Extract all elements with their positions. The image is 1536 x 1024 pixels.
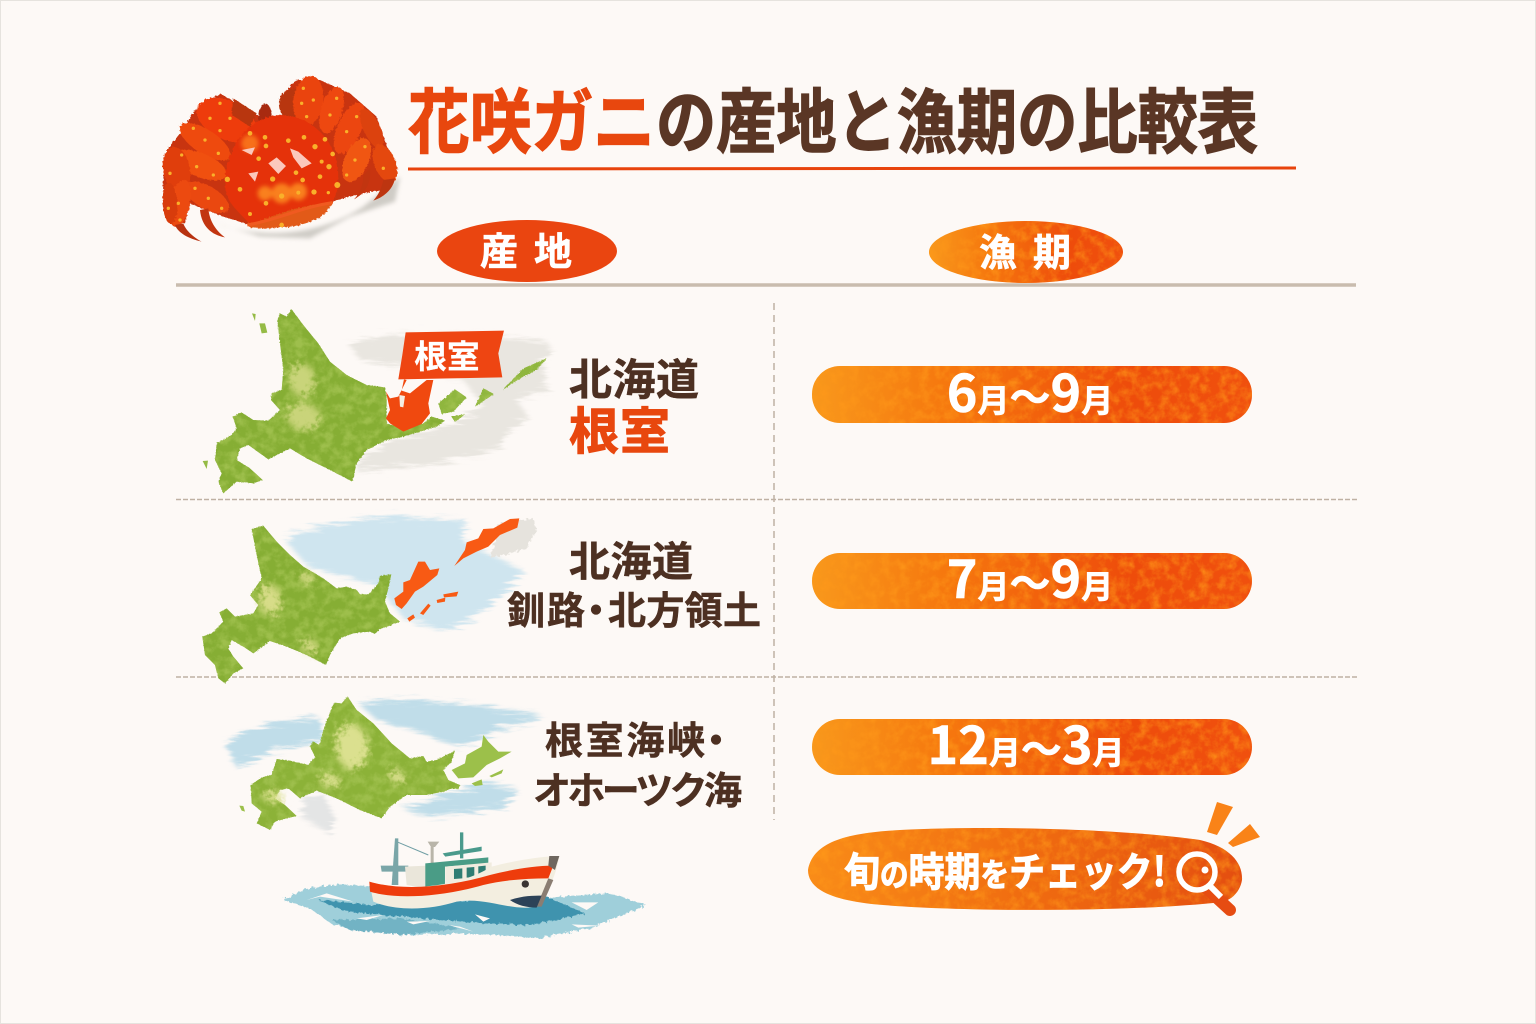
- label: Nemuro Strait and Okhotsk Sea: [533, 710, 742, 815]
- label: Hokkaido Kushiro and Northern Territories: 北海道: [569, 528, 693, 588]
- label: Hokkaido Kushiro and Northern Territories: 北方領土: [608, 580, 761, 635]
- label: Nemuro Strait and Okhotsk Sea: ・: [697, 710, 735, 765]
- text: callout label: 旬の時期をチェック!: [844, 840, 1166, 898]
- label: Hokkaido Nemuro: 北海道: [569, 346, 699, 408]
- callout: check the season: [808, 802, 1260, 910]
- column heading: season: [929, 221, 1123, 283]
- label: Hokkaido Nemuro: [569, 346, 699, 464]
- icon: fishing boat on waves: [283, 832, 647, 938]
- icon: emphasis rays: [1207, 802, 1260, 847]
- title: 花咲ガニ: [408, 67, 655, 168]
- label: Hokkaido Kushiro and Northern Territories: [507, 528, 761, 635]
- title: [408, 67, 1258, 168]
- label: Hokkaido Kushiro and Northern Territories: ・: [577, 580, 615, 635]
- season bar: June to September: 6月〜9月: [947, 352, 1113, 427]
- icon: hanasaki crab: [159, 74, 402, 242]
- title underline: [408, 168, 1296, 169]
- map: Hokkaido with Nemuro Strait and Okhotsk Sea: [225, 697, 543, 833]
- label: Nemuro Strait and Okhotsk Sea: オホーツク海: [533, 760, 742, 815]
- season bar: December to March: [812, 704, 1252, 779]
- season bar: July to September: [812, 538, 1252, 613]
- season bar: June to September: [812, 352, 1252, 427]
- column heading: origin: 産地: [480, 221, 572, 276]
- flag: Nemuro label: 根室: [414, 331, 480, 378]
- icon: magnifying glass: [1179, 854, 1230, 910]
- column heading: origin: [437, 220, 617, 282]
- label: Nemuro Strait and Okhotsk Sea: 根室海峡: [545, 710, 705, 765]
- column heading: season: 漁期: [979, 222, 1071, 277]
- label: Hokkaido Nemuro: 根室: [569, 392, 670, 464]
- label: Hokkaido Kushiro and Northern Territories: 釧路: [507, 580, 585, 635]
- title: の産地と漁期の比較表: [656, 67, 1258, 168]
- flag: Nemuro label: [398, 331, 504, 379]
- season bar: December to March: 12月〜3月: [927, 704, 1125, 779]
- map: Hokkaido with Kushiro and Northern Territories: [202, 517, 537, 683]
- map: Hokkaido with Nemuro highlighted: [203, 309, 552, 493]
- season bar: July to September: 7月〜9月: [947, 538, 1113, 613]
